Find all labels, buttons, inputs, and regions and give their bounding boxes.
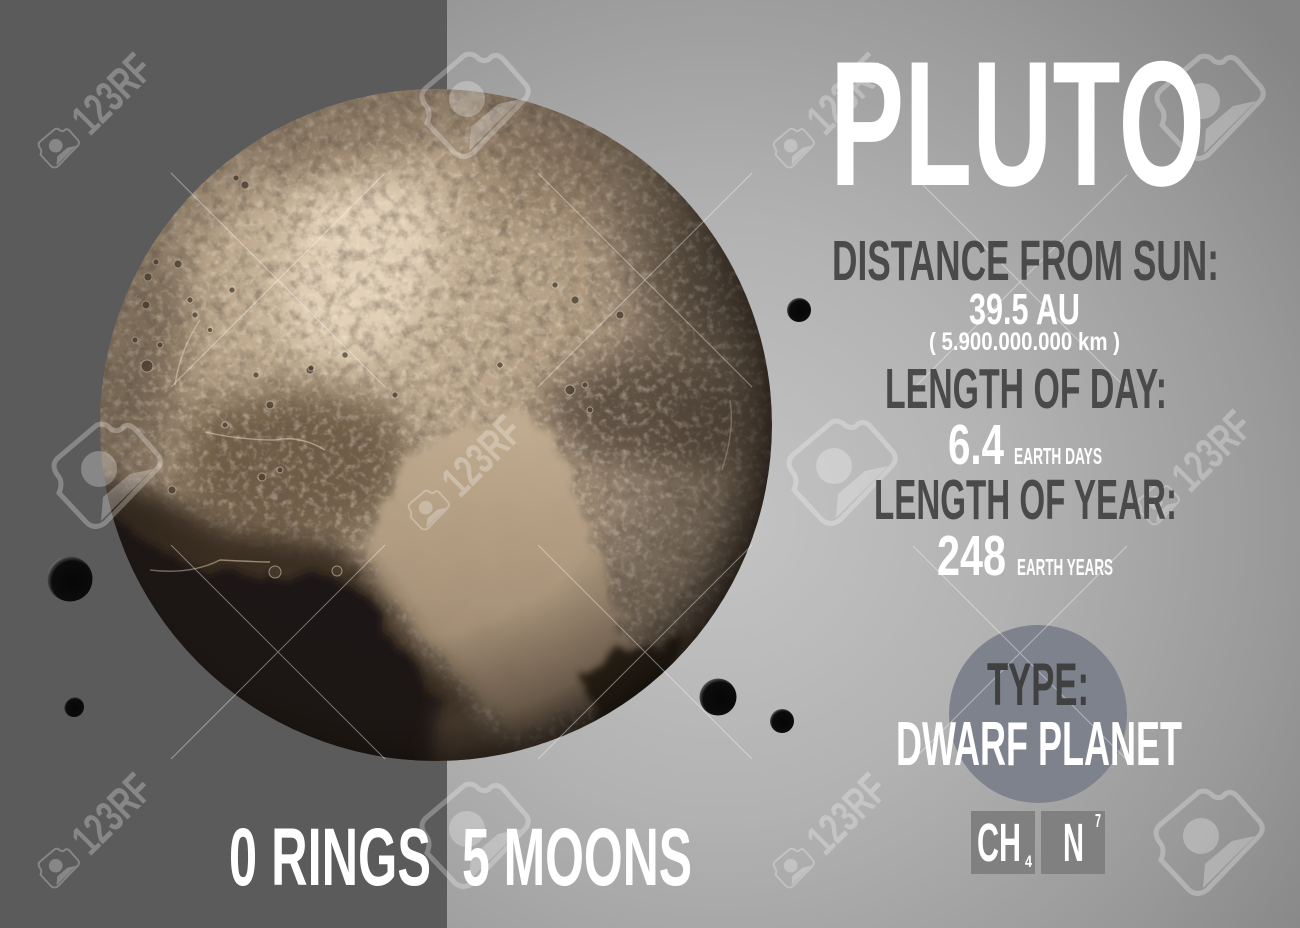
- moon 1: [787, 298, 811, 322]
- stat block: length of year: 248: [937, 524, 1006, 588]
- moon 4: [700, 678, 736, 716]
- surface: western limb cratered zone: [100, 250, 190, 470]
- surface: heart-shaped light plain: [362, 410, 632, 736]
- surface: south limb tone: [426, 702, 524, 761]
- stat block: length of year: [874, 468, 1177, 588]
- planet: Pluto: [100, 89, 772, 761]
- surface: north limb tan: [240, 90, 440, 190]
- surface: craters: [132, 175, 624, 578]
- panel: dark left column: [0, 0, 447, 928]
- surface: eastern medium terrain: [670, 560, 744, 622]
- type circle: [949, 625, 1127, 803]
- surface: fine texture: [100, 90, 773, 761]
- surface: bright northern streak: [280, 170, 440, 370]
- stat block: length of day: 6.4: [948, 413, 1004, 477]
- watermark: 123RF marks: 123RF: [797, 764, 897, 864]
- surface: dark southwest region: [112, 516, 443, 761]
- surface: fine highlights: [100, 90, 773, 761]
- surface: upper tan band: [463, 119, 594, 234]
- moon 5: [770, 709, 794, 733]
- stat block: distance from sun: [832, 229, 1219, 356]
- watermark: 123RF marks: 123RF: [1162, 401, 1262, 501]
- surface: dark eastern band: [540, 345, 760, 470]
- watermark: 123RF marks: 123RF: [62, 764, 162, 864]
- watermark: 123RF marks: 123RF: [62, 44, 162, 144]
- element: CH4: 4: [1025, 852, 1032, 871]
- surface: dark southwest transition: [90, 480, 470, 800]
- element box: nitrogen: [1041, 811, 1105, 874]
- watermark: 123RF marks: 123RF: [432, 406, 532, 506]
- element box: methane: [971, 811, 1035, 874]
- watermark: 123RF marks: 123RF: [797, 44, 897, 144]
- element: CH4: CH: [977, 813, 1021, 873]
- stat block: distance from sun: ( 5.900.000.000 km ): [929, 328, 1120, 356]
- stat block: length of day: EARTH DAYS: [1014, 443, 1102, 469]
- stat block: length of year: EARTH YEARS: [1017, 554, 1113, 580]
- surface: ridges: [150, 320, 731, 571]
- moon 3: [64, 697, 84, 717]
- moon 2: [48, 556, 92, 602]
- surface: northeast shadow: [640, 170, 790, 400]
- watermark crosses: [171, 173, 1127, 760]
- rings count: 0 RINGS: [229, 812, 431, 903]
- stat block: length of day: [885, 357, 1167, 477]
- moons count: 5 MOONS: [462, 812, 692, 903]
- surface: southern dark patch: [582, 640, 690, 730]
- type label: TYPE:: [987, 651, 1089, 718]
- stat block: distance from sun: 39.5 AU: [969, 285, 1080, 334]
- surface: mottled centre-west terrain: [180, 385, 410, 550]
- element: N7: N: [1063, 813, 1084, 873]
- element: N7: 7: [1095, 811, 1101, 831]
